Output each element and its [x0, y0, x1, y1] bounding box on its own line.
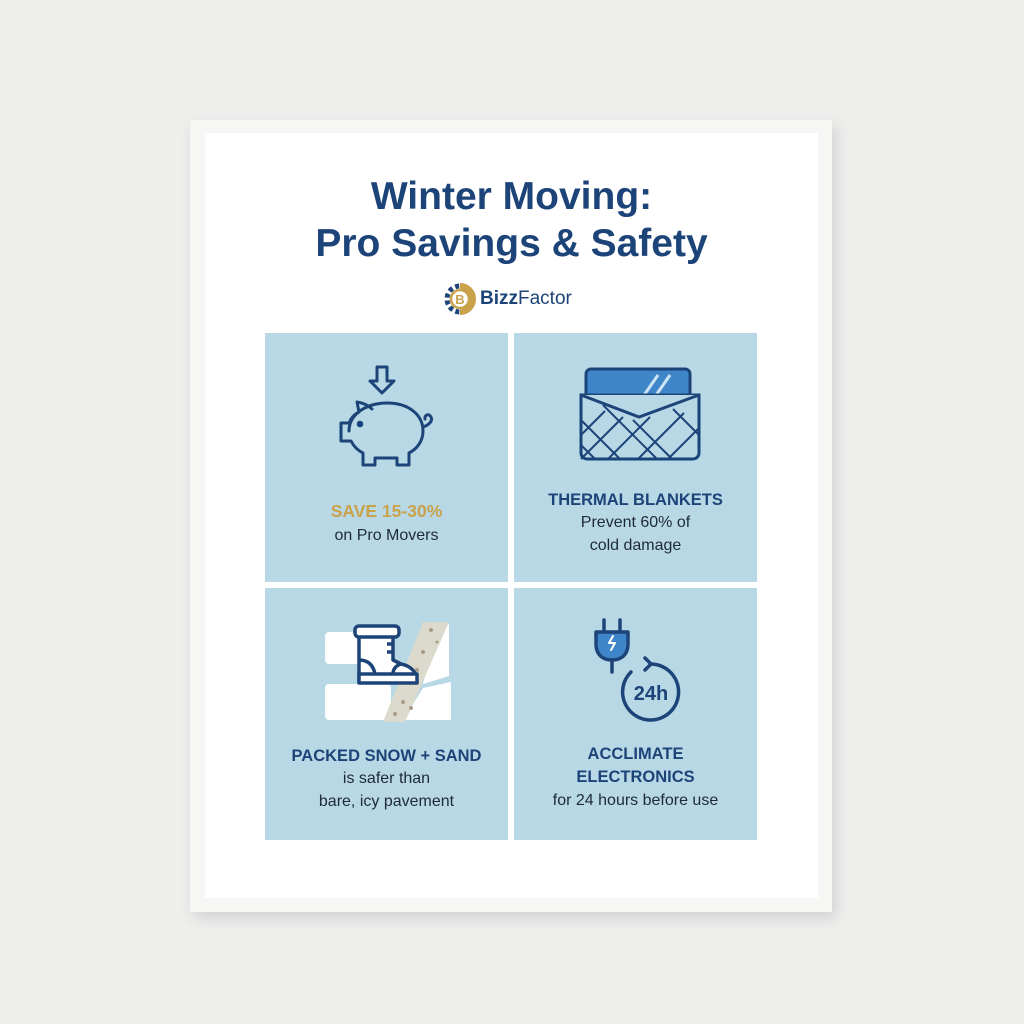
icon: boot on snow	[325, 622, 451, 722]
icon: blanket	[580, 368, 700, 460]
title	[315, 175, 708, 265]
title: Winter Moving:	[371, 175, 652, 218]
panel: thermal blankets: cold damage	[590, 537, 681, 554]
icon: gear B	[444, 283, 476, 315]
logo text: BizzFactor	[480, 288, 572, 309]
poster	[205, 133, 818, 898]
title: Pro Savings & Safety	[315, 222, 708, 265]
text: blankets: THERMAL BLANKETS	[548, 491, 723, 509]
panel: packed snow	[265, 588, 508, 840]
panel: electronics: ELECTRONICS	[576, 768, 695, 786]
text: snow: PACKED SNOW + SAND	[292, 747, 481, 765]
icon: plug with 24h: 24h	[634, 683, 668, 705]
text: electronics: ACCLIMATE	[588, 745, 683, 763]
text: save: SAVE 15-30%	[331, 501, 442, 521]
panel: save: on Pro Movers	[334, 527, 439, 544]
panel: thermal blankets	[514, 333, 757, 582]
panel: electronics: for 24 hours before use	[553, 792, 718, 809]
panel: electronics	[514, 588, 757, 840]
icon: gear B: B	[455, 292, 465, 307]
panel: thermal blankets: Prevent 60% of	[581, 514, 690, 531]
logo	[444, 283, 572, 315]
panel: packed snow: is safer than	[343, 770, 430, 787]
icon: plug with 24h	[594, 618, 680, 722]
panel: save	[265, 333, 508, 582]
icon: piggy bank	[340, 366, 434, 466]
frame	[190, 120, 832, 912]
panel: packed snow: bare, icy pavement	[319, 793, 454, 810]
